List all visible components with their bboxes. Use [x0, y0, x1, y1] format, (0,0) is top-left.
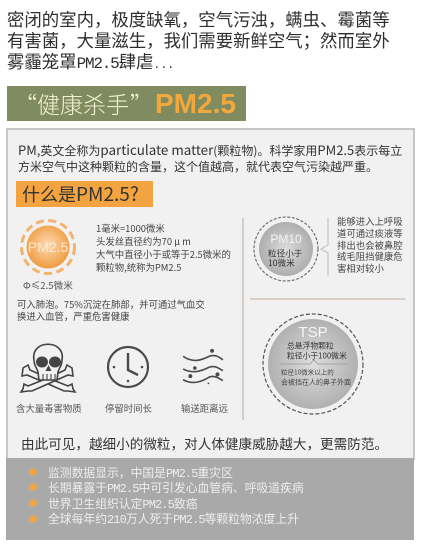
title banner: [7, 86, 246, 121]
label: harmful substances: 含大量毒害物质: [16, 401, 82, 415]
PM10 description: 能够进入上呼吸: [337, 214, 403, 228]
PM2.5 description: [96, 221, 231, 274]
PM2.5 health effect text: [17, 297, 205, 323]
PM10 description: [337, 214, 403, 275]
PM10 description: 害相对较小: [337, 261, 384, 275]
bottom facts panel: [6, 458, 414, 540]
PM2.5 description: 1毫米=1000微米: [96, 221, 165, 235]
icon: skull and crossbones: [20, 344, 77, 393]
icon: PM10 grey circle: [254, 216, 328, 282]
intro text: 雾霾笼罩PM2.5肆虐...: [7, 49, 174, 74]
intro text: 密闭的室内，极度缺氧，空气污浊，螨虫、霉菌等: [7, 7, 390, 32]
icon: PM10 grey circle: 10微米: [268, 257, 295, 269]
icon: TSP grey circle: 粒径小于100微米: [287, 350, 347, 362]
title text: health killer: ”: [130, 86, 153, 120]
definition text: [18, 139, 402, 175]
icon: TSP grey circle: TSP: [298, 324, 328, 341]
label: long residence time: 停留时间长: [105, 401, 152, 415]
horizontal divider: [250, 298, 405, 300]
intro text: 有害菌，大量滋生，我们需要新鲜空气；然而室外: [7, 28, 390, 53]
fact list: 监测数据显示，中国是PM2.5重灾区: [48, 464, 233, 481]
icon: TSP grey circle: 总悬浮物颗粒: [287, 340, 334, 352]
definition text: PM,英文全称为particulate matter(颗粒物)。科学家用PM2.5表示每立: [18, 139, 402, 159]
heading: what is PM2.5: 什么是PM2.5?: [22, 180, 139, 207]
fact list: [48, 464, 304, 527]
fact list: 世界卫生组织认定PM2.5致癌: [48, 495, 198, 512]
title text: PM2.5: PM2.5: [155, 88, 236, 119]
PM2.5 size label: Φ≤2.5微米: [23, 278, 73, 292]
label: long transport distance: 输送距离远: [181, 401, 228, 415]
PM2.5 health effect text: 换进入血管，严重危害健康: [17, 309, 130, 323]
vertical divider: [242, 218, 244, 420]
intro text: [7, 7, 390, 74]
icon: TSP grey circle: 粒径10微米以上的: [281, 366, 334, 376]
title text: health killer: [14, 86, 153, 120]
PM2.5 description: 头发丝直径约为70 μ m: [96, 234, 191, 248]
PM10 description: 排出也会被鼻腔: [337, 238, 403, 252]
title text: health killer: 健康杀手: [37, 86, 129, 120]
icon: TSP grey circle: 会被挡在人的鼻子外面: [281, 378, 351, 388]
PM10 description: 绒毛阻挡健康危: [337, 249, 403, 263]
conclusion text: 由此可见，越细小的微粒，对人体健康威胁越大，更需防范。: [21, 433, 388, 453]
icon: PM10 grey circle: 粒径小于: [268, 248, 303, 260]
fact list: 全球每年约210万人死于PM2.5等颗粒物浓度上升: [48, 510, 299, 527]
PM2.5 description: 大气中直径小于或等于2.5微米的: [96, 247, 231, 261]
icon: PM10 grey circle: PM10: [270, 232, 302, 246]
main panel: [6, 128, 415, 460]
PM2.5 description: 颗粒物,统称为PM2.5: [96, 260, 181, 274]
icon: PM2.5 orange circle: [20, 219, 76, 275]
bullet icons: [29, 468, 37, 523]
PM2.5 health effect text: 可入肺泡。75%沉淀在肺部，并可通过气血交: [17, 297, 205, 311]
PM10 description: 道可通过痰液等: [337, 226, 403, 240]
icon: wind with particles: [182, 348, 224, 384]
definition text: 方米空气中这种颗粒的含量，这个值越高，就代表空气污染越严重。: [18, 158, 378, 175]
icon: TSP grey circle: [262, 313, 364, 415]
title text: health killer: “: [14, 86, 37, 120]
icon: PM2.5 orange circle: PM2.5: [28, 239, 68, 255]
fact list: 长期暴露于PM2.5中可引发心血管病、呼吸道疾病: [48, 479, 304, 496]
icon: clock: [106, 346, 150, 388]
